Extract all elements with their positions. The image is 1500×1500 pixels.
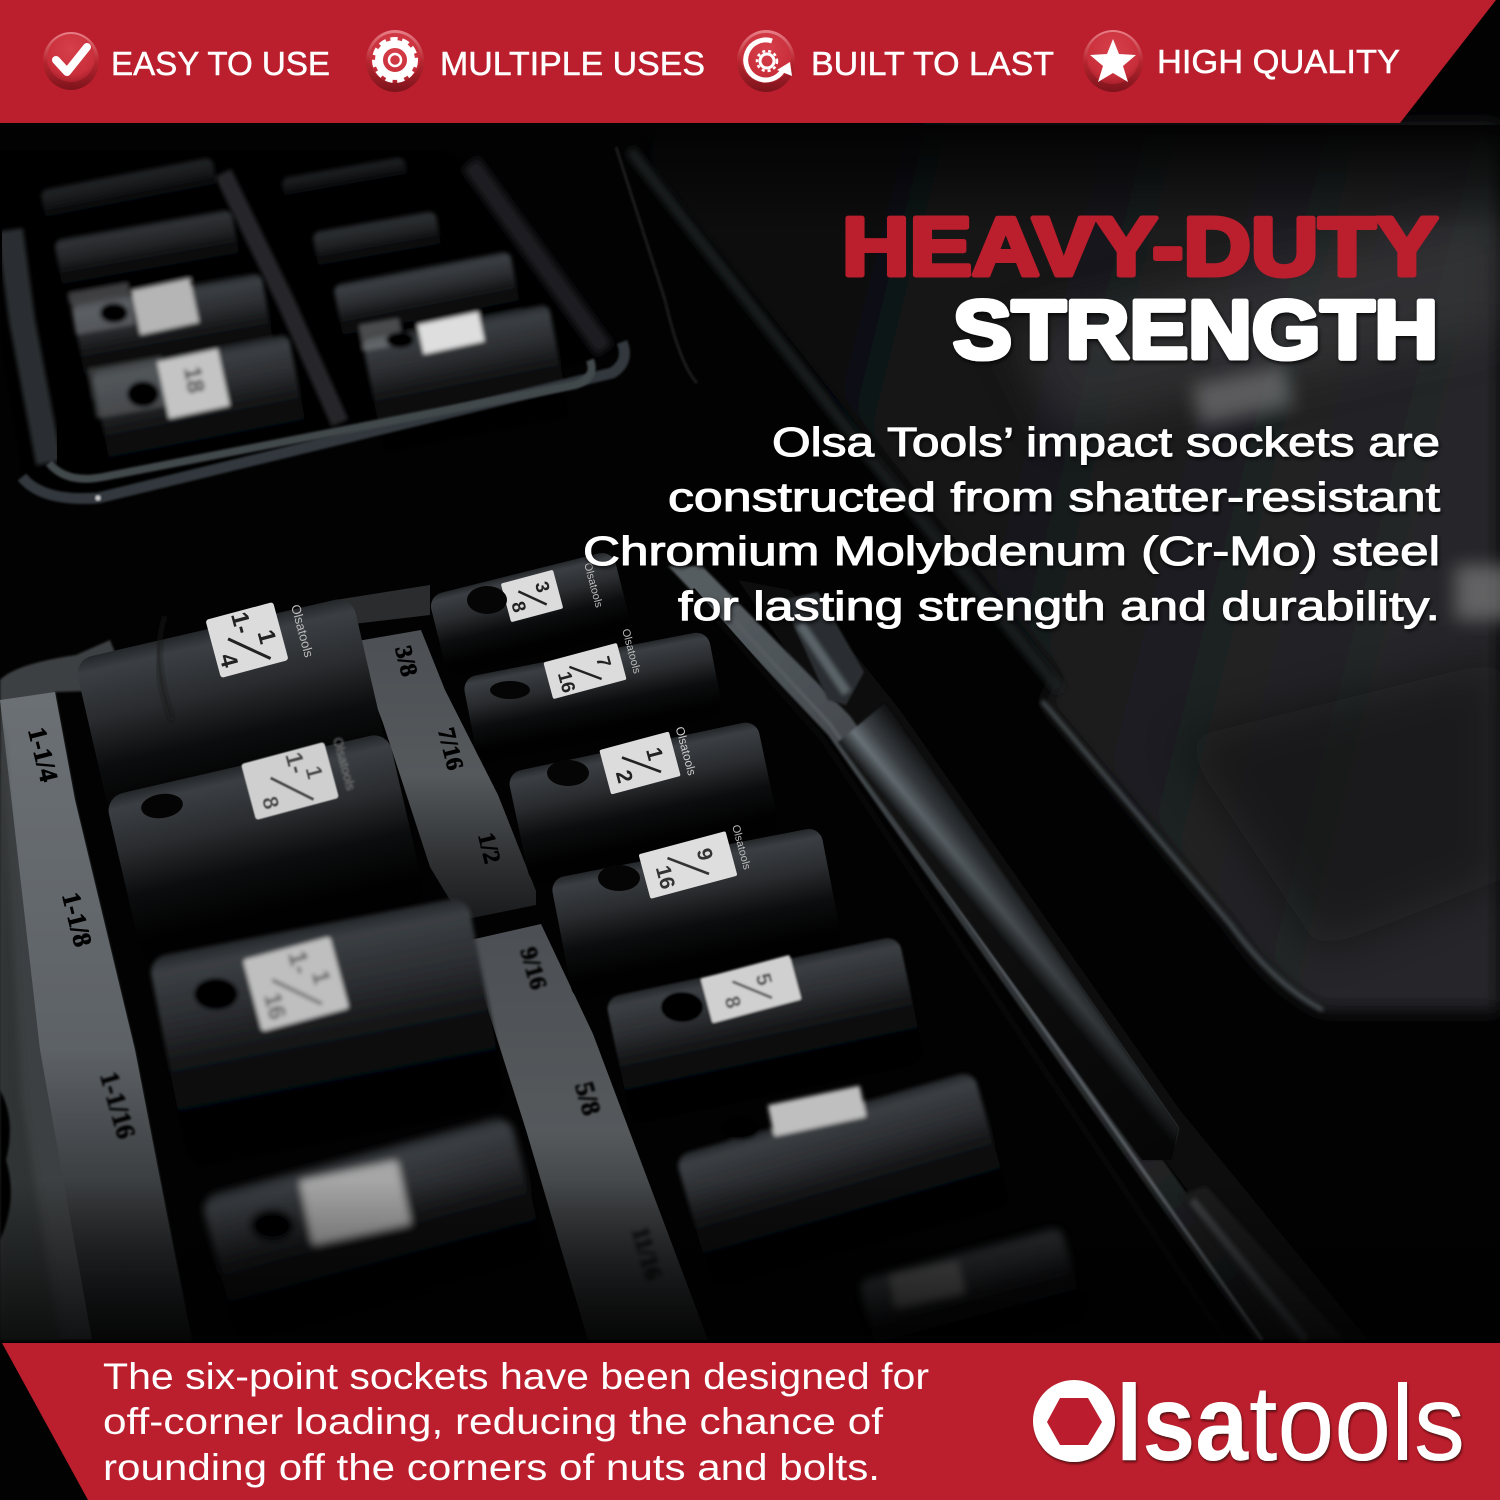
socket 1-1/8: 1	[300, 763, 328, 782]
photo: lower tray steel bars	[0, 585, 708, 1340]
bar size markings: 7/16	[432, 725, 468, 773]
upper tray sockets	[40, 156, 570, 490]
text block: six-point sockets: off-corner loading, reducing the chance of	[103, 1401, 884, 1442]
bar size markings	[22, 643, 666, 1283]
photo: blurred case at upper right	[620, 125, 1500, 1010]
socket 1-1/16: 16	[258, 990, 291, 1023]
photo: bottom fade	[0, 1180, 1500, 1345]
icon: check mark	[43, 32, 99, 90]
bar size markings: 1/2	[472, 830, 505, 866]
socket 5/8: 5	[751, 971, 776, 988]
logo: Olsatools: tools	[1249, 1362, 1465, 1483]
text block: six-point sockets	[103, 1356, 929, 1488]
logo: Olsatools	[1031, 1362, 1465, 1483]
bar size markings: 1-1/16	[94, 1069, 141, 1142]
bar size markings: 5/8	[569, 1079, 606, 1119]
socket 1/2: 1	[641, 745, 668, 763]
label: built to last: BUILT TO LAST	[811, 45, 1054, 82]
socket 1-1/8	[105, 732, 427, 968]
socket 5/8	[605, 936, 925, 1125]
socket 1-1/4: 1-	[225, 609, 257, 637]
icon: star	[1083, 30, 1143, 92]
photo: case edge highlight	[1042, 701, 1323, 1010]
socket 1-1/8: Olsatools	[330, 736, 359, 792]
socket 7/16	[462, 628, 724, 764]
socket 1-1/4: Olsatools	[288, 603, 317, 659]
bar size markings: 3/8	[389, 643, 422, 679]
photo: tray rail and hinge tube	[668, 566, 1368, 1340]
hinge tube upper segment	[782, 592, 864, 705]
socket 9/16: 16	[651, 863, 679, 892]
icon: rotating gear	[737, 30, 795, 92]
socket 1-1/16: 1	[306, 967, 335, 987]
socket 5/8: 8	[720, 994, 745, 1011]
bar size markings: 1-1/4	[22, 724, 64, 785]
label: multiple uses: MULTIPLE USES	[440, 45, 705, 82]
photo: upper tray	[0, 147, 697, 501]
bar size markings: 9/16	[514, 944, 551, 993]
text block: description: Olsa Tools’ impact sockets are	[772, 419, 1440, 465]
socket 3/8: Olsatools	[581, 562, 605, 609]
socket 1-1/8: 1-	[279, 749, 311, 777]
label: easy to use: EASY TO USE	[111, 45, 330, 82]
socket 1/2: 2	[611, 767, 638, 786]
socket 9/16	[550, 824, 844, 1002]
socket 7/16: 7	[591, 654, 614, 670]
socket far bottom	[858, 1226, 1084, 1367]
text block: description: constructed from shatter-resistant	[668, 474, 1441, 520]
text block: description: for lasting strength and durability.	[678, 583, 1440, 629]
socket 9/16: 9	[692, 846, 717, 863]
label: high quality: HIGH QUALITY	[1157, 43, 1400, 80]
socket lower middle	[675, 1071, 1012, 1291]
socket 3/8	[428, 550, 633, 678]
socket 1/2: Olsatools	[673, 725, 699, 777]
text block: description: Chromium Molybdenum (Cr-Mo) steel	[583, 528, 1440, 574]
socket 1/2	[507, 720, 780, 885]
bottom banner	[2, 1343, 1500, 1500]
text block: six-point sockets: rounding off the corners of nuts and bolts.	[103, 1447, 880, 1488]
photo: upper diagonal rail	[630, 150, 1060, 690]
socket 7/16: Olsatools	[619, 628, 643, 675]
bar size markings: 11/16	[626, 1224, 666, 1283]
hinge tube main segment	[838, 703, 1178, 1160]
logo: Olsatools: lsa	[1116, 1362, 1249, 1483]
socket 1-1/4	[74, 596, 394, 845]
socket 3/8: 8	[506, 599, 529, 615]
socket 1-1/8: 8	[257, 794, 284, 812]
socket 1-1/16: 1-	[282, 947, 317, 977]
bar size markings: 1-1/8	[56, 889, 98, 950]
upper tray rim	[22, 342, 624, 501]
icon: gear	[366, 30, 424, 92]
socket bottom left	[200, 1114, 548, 1342]
socket 1-1/4: 4	[213, 651, 243, 671]
logo: Olsatools: O	[1031, 1362, 1115, 1483]
text block: six-point sockets: The six-point sockets have been designed for	[103, 1356, 929, 1397]
heading: strength: STRENGTH	[953, 283, 1438, 376]
text block: description	[583, 419, 1441, 629]
socket 1-1/16	[148, 896, 508, 1169]
top banner	[0, 0, 1496, 123]
socket 3/8: 3	[530, 579, 553, 595]
upper tray sockets: 18	[178, 364, 209, 395]
hinge tube lower segment	[1180, 1186, 1345, 1340]
socket 9/16: Olsatools	[729, 824, 753, 871]
heading: heavy-duty: HEAVY-DUTY	[842, 200, 1438, 293]
socket 7/16: 16	[553, 669, 579, 695]
socket 1-1/4: 1	[252, 627, 281, 647]
